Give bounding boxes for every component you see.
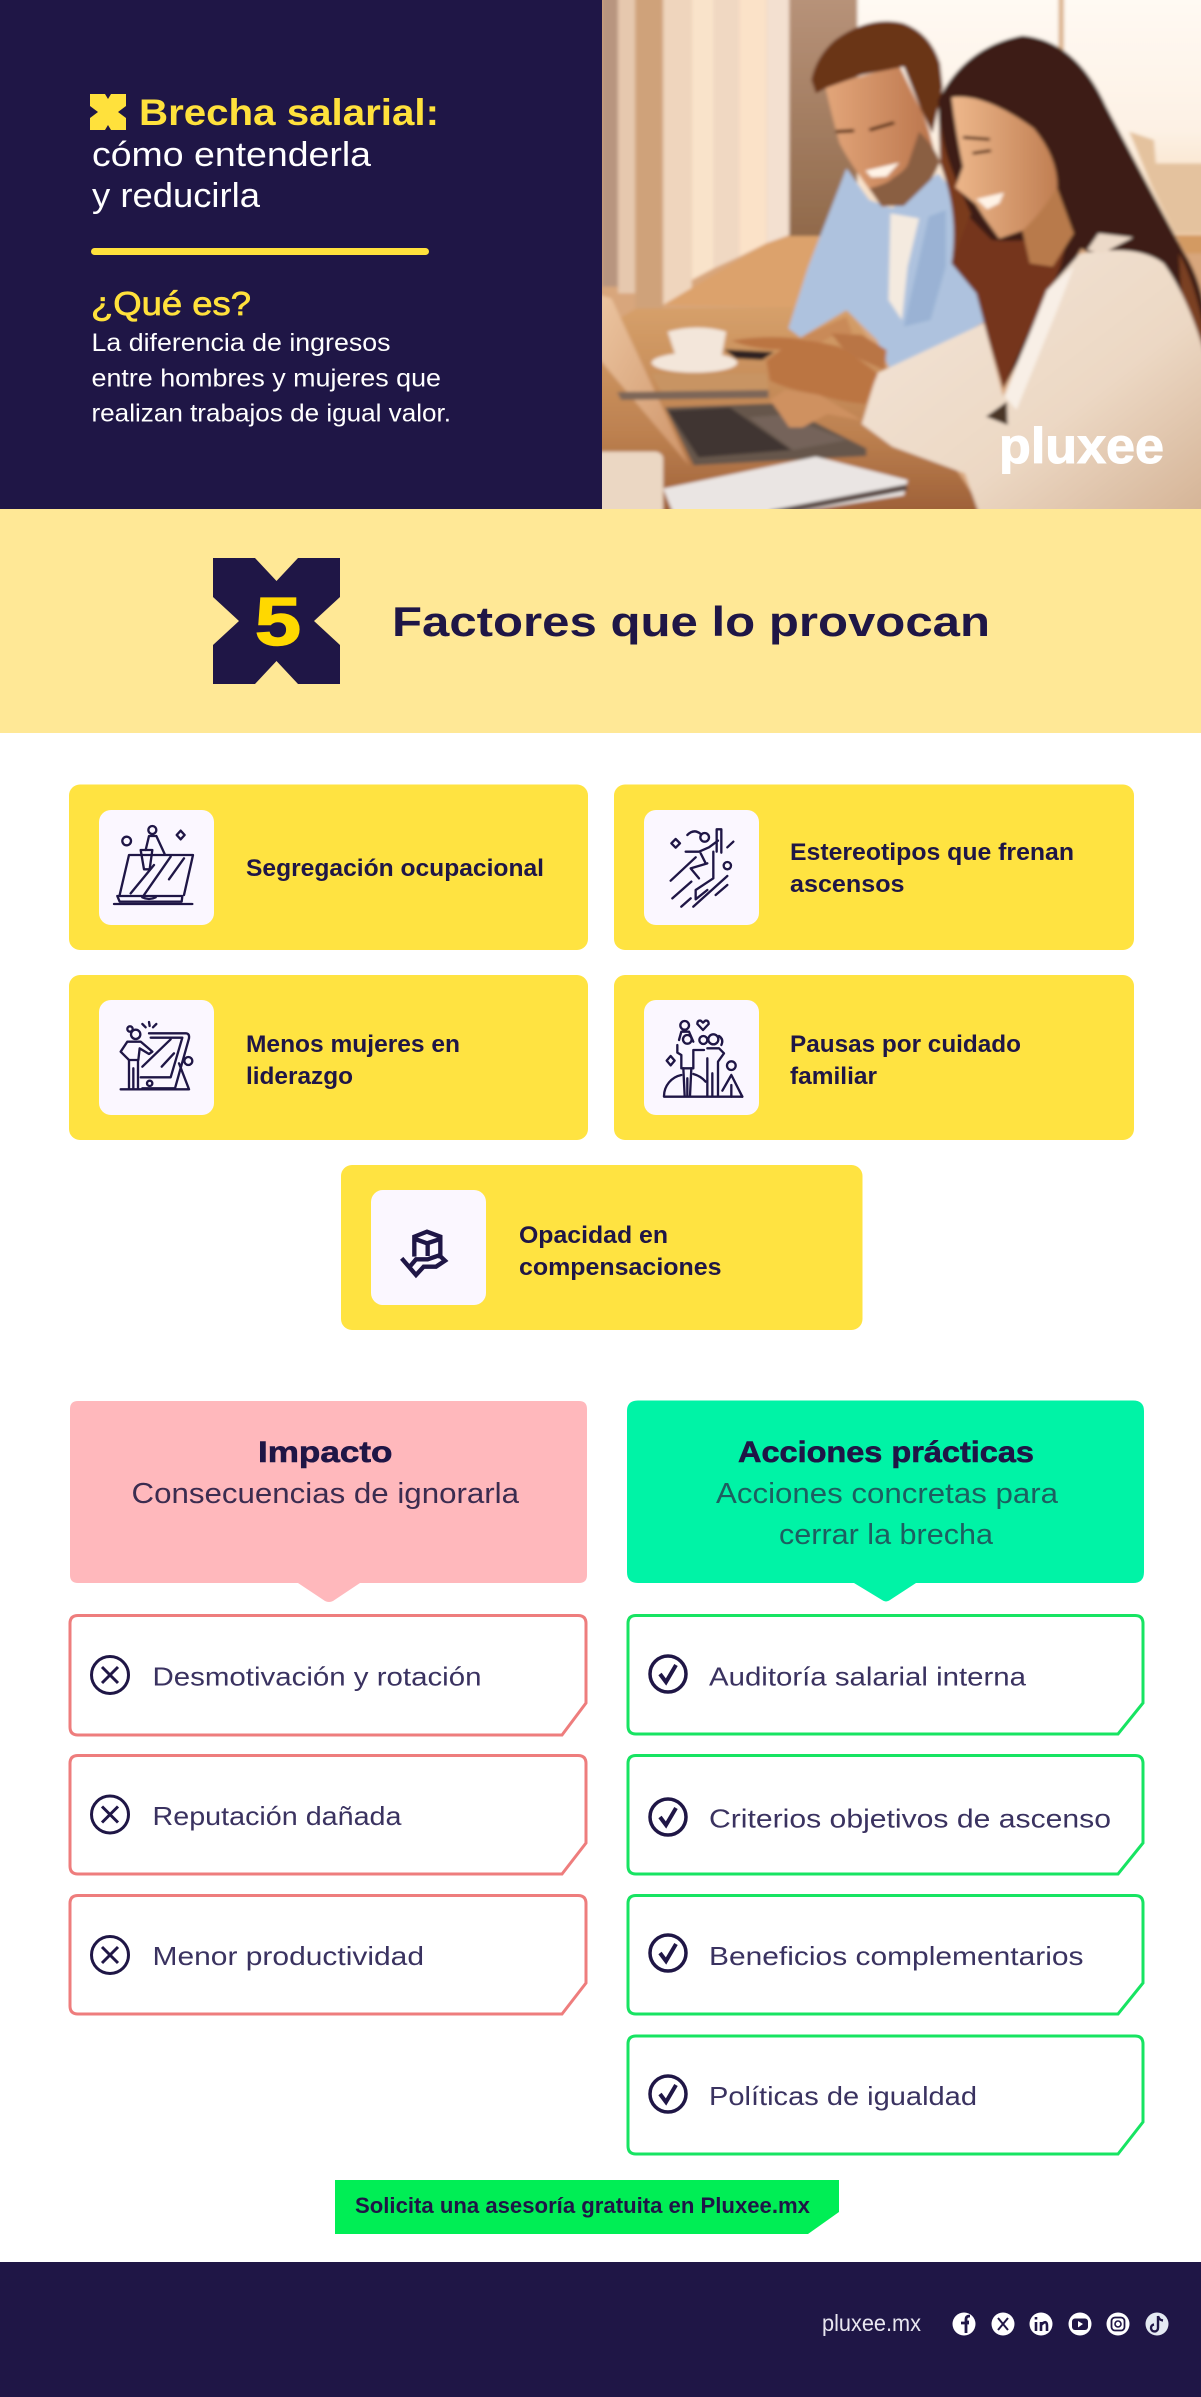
label: Menor productividad [152, 1941, 424, 1971]
action item: auditoria [628, 1616, 1143, 1734]
label: Menos mujeres en [246, 1031, 460, 1058]
divider line [91, 248, 429, 255]
hands [731, 337, 878, 404]
header panel [0, 0, 603, 509]
icon: person on laptop [114, 826, 193, 904]
definition text: realizan trabajos de igual valor. [92, 400, 451, 428]
icon: x circle [92, 1796, 128, 1833]
impact item: productividad [70, 1896, 586, 2014]
icon: x with number 5 [213, 558, 340, 684]
call to action: Solicita una asesoría gratuita en Pluxee.mx [355, 2193, 811, 2218]
title: y reducirla [92, 177, 260, 215]
icon: tiktok [1146, 2312, 1168, 2336]
factor card: opacidad [341, 1165, 862, 1330]
title: cómo entenderla [92, 136, 371, 174]
label [790, 839, 1074, 898]
icon: hand holding box [402, 1232, 445, 1275]
icon: woman and tablet [121, 1022, 192, 1089]
factors banner [0, 509, 1201, 733]
action item: criterios [628, 1756, 1143, 1874]
label: familiar [790, 1063, 877, 1090]
label [519, 1222, 722, 1281]
action item: beneficios [628, 1896, 1143, 2014]
factor card: segregacion [69, 784, 588, 950]
label: Criterios objetivos de ascenso [709, 1804, 1111, 1834]
man [788, 168, 988, 375]
title [92, 92, 439, 215]
definition text: La diferencia de ingresos [92, 329, 390, 357]
action item: politicas [628, 2036, 1143, 2154]
icon: facebook [952, 2312, 976, 2336]
footer [0, 2262, 1201, 2397]
icon: yellow x logo [90, 94, 126, 130]
blouse [862, 250, 1201, 517]
icon: check circle [650, 1656, 686, 1692]
factor card: cuidado familiar [614, 975, 1134, 1140]
label: Beneficios complementarios [709, 1941, 1084, 1971]
heading: Factores que lo provocan [392, 598, 990, 645]
definition text [92, 329, 451, 428]
label: Segregación ocupacional [246, 855, 544, 882]
icon: check circle [650, 1935, 686, 1971]
icon: x [992, 2312, 1014, 2336]
subheading: Consecuencias de ignorarla [132, 1478, 520, 1510]
woman hair [938, 36, 1201, 388]
label [790, 1031, 1021, 1090]
subheading: cerrar la brecha [779, 1519, 994, 1551]
icon: linkedin [1030, 2312, 1052, 2336]
label: compensaciones [519, 1254, 722, 1281]
label: Desmotivación y rotación [152, 1662, 482, 1692]
title: Brecha salarial: [139, 92, 439, 133]
label: Estereotipos que frenan [790, 839, 1074, 866]
panel: acciones header [627, 1400, 1144, 1602]
call to action [335, 2180, 839, 2234]
cups and notebooks [724, 349, 774, 360]
definition text: entre hombres y mujeres que [92, 364, 441, 392]
panel: impacto header [70, 1401, 587, 1602]
factor card: estereotipos [614, 784, 1134, 950]
icon: youtube [1068, 2312, 1092, 2336]
logo: pluxee: pluxee [999, 418, 1164, 474]
icon: check circle [650, 2076, 686, 2112]
label: Reputación dañada [152, 1801, 402, 1831]
label: Políticas de igualdad [709, 2081, 977, 2111]
impact item: reputacion [70, 1756, 586, 1874]
factor card: liderazgo [69, 975, 588, 1140]
label: Pausas por cuidado [790, 1031, 1021, 1058]
icon: check circle [650, 1799, 686, 1835]
label: Auditoría salarial interna [709, 1662, 1027, 1692]
label [246, 1031, 460, 1090]
label: ascensos [790, 871, 904, 898]
heading: Acciones prácticas [738, 1436, 1034, 1469]
laptop [665, 403, 866, 465]
subheading [716, 1478, 1059, 1551]
subheading: Acciones concretas para [716, 1478, 1059, 1510]
icon: x circle [92, 1656, 128, 1694]
icon: x circle [92, 1936, 128, 1974]
subheading: que es: ¿Qué es? [91, 285, 251, 322]
icon: x with number 5: 5 [255, 584, 301, 660]
icon: woman climbing [671, 829, 733, 907]
icon: family [664, 1021, 742, 1097]
impact item: desmotivacion [70, 1616, 586, 1735]
label: Opacidad en [519, 1222, 668, 1249]
photo: couple at laptop [594, 0, 1201, 517]
heading: Impacto [258, 1436, 392, 1469]
label: liderazgo [246, 1063, 353, 1090]
icon: instagram [1106, 2312, 1130, 2336]
footer url: pluxee.mx [822, 2310, 921, 2336]
